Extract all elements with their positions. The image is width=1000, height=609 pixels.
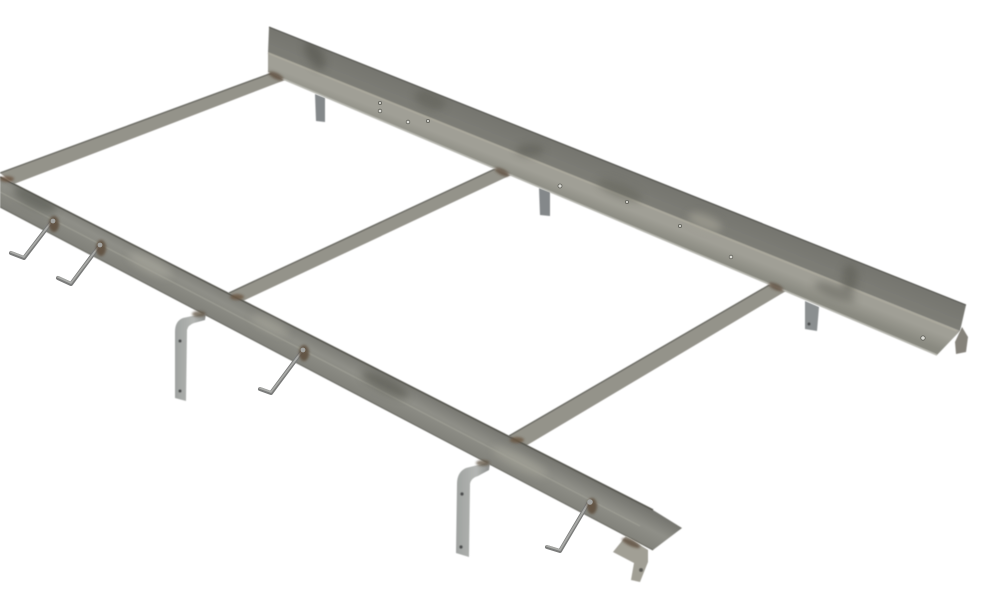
hook 1 xyxy=(11,220,53,258)
lower edge highlight xyxy=(283,79,937,355)
top edge line xyxy=(269,27,966,305)
rear end bracket xyxy=(955,327,968,354)
right crossbar xyxy=(509,284,786,447)
welds on front bar xyxy=(0,176,641,550)
tall bracket left xyxy=(175,313,206,401)
left crossbar xyxy=(0,73,285,184)
top edge of front bar xyxy=(0,177,653,510)
hook 3 xyxy=(260,350,303,393)
front bar surface marks xyxy=(10,182,550,482)
rear angle beam xyxy=(268,27,966,355)
rear beam holes xyxy=(378,101,925,340)
hook 2 xyxy=(58,245,100,284)
crossbar welds on rear beam xyxy=(267,70,785,293)
lower face of rear beam xyxy=(268,53,960,355)
bottom edge of front bar xyxy=(0,207,653,550)
front bar xyxy=(0,177,682,550)
front bar face xyxy=(0,177,682,550)
middle crossbar xyxy=(229,168,511,301)
front end bracket xyxy=(613,536,648,582)
tall bracket right xyxy=(456,462,490,557)
small rear tabs xyxy=(315,94,819,331)
hook 4 xyxy=(547,502,589,551)
rear beam surface marks xyxy=(300,37,858,306)
upper face of rear beam xyxy=(268,27,966,331)
hook bolt heads xyxy=(51,219,593,505)
central fold of front bar xyxy=(0,192,640,526)
crease highlight xyxy=(268,53,957,331)
